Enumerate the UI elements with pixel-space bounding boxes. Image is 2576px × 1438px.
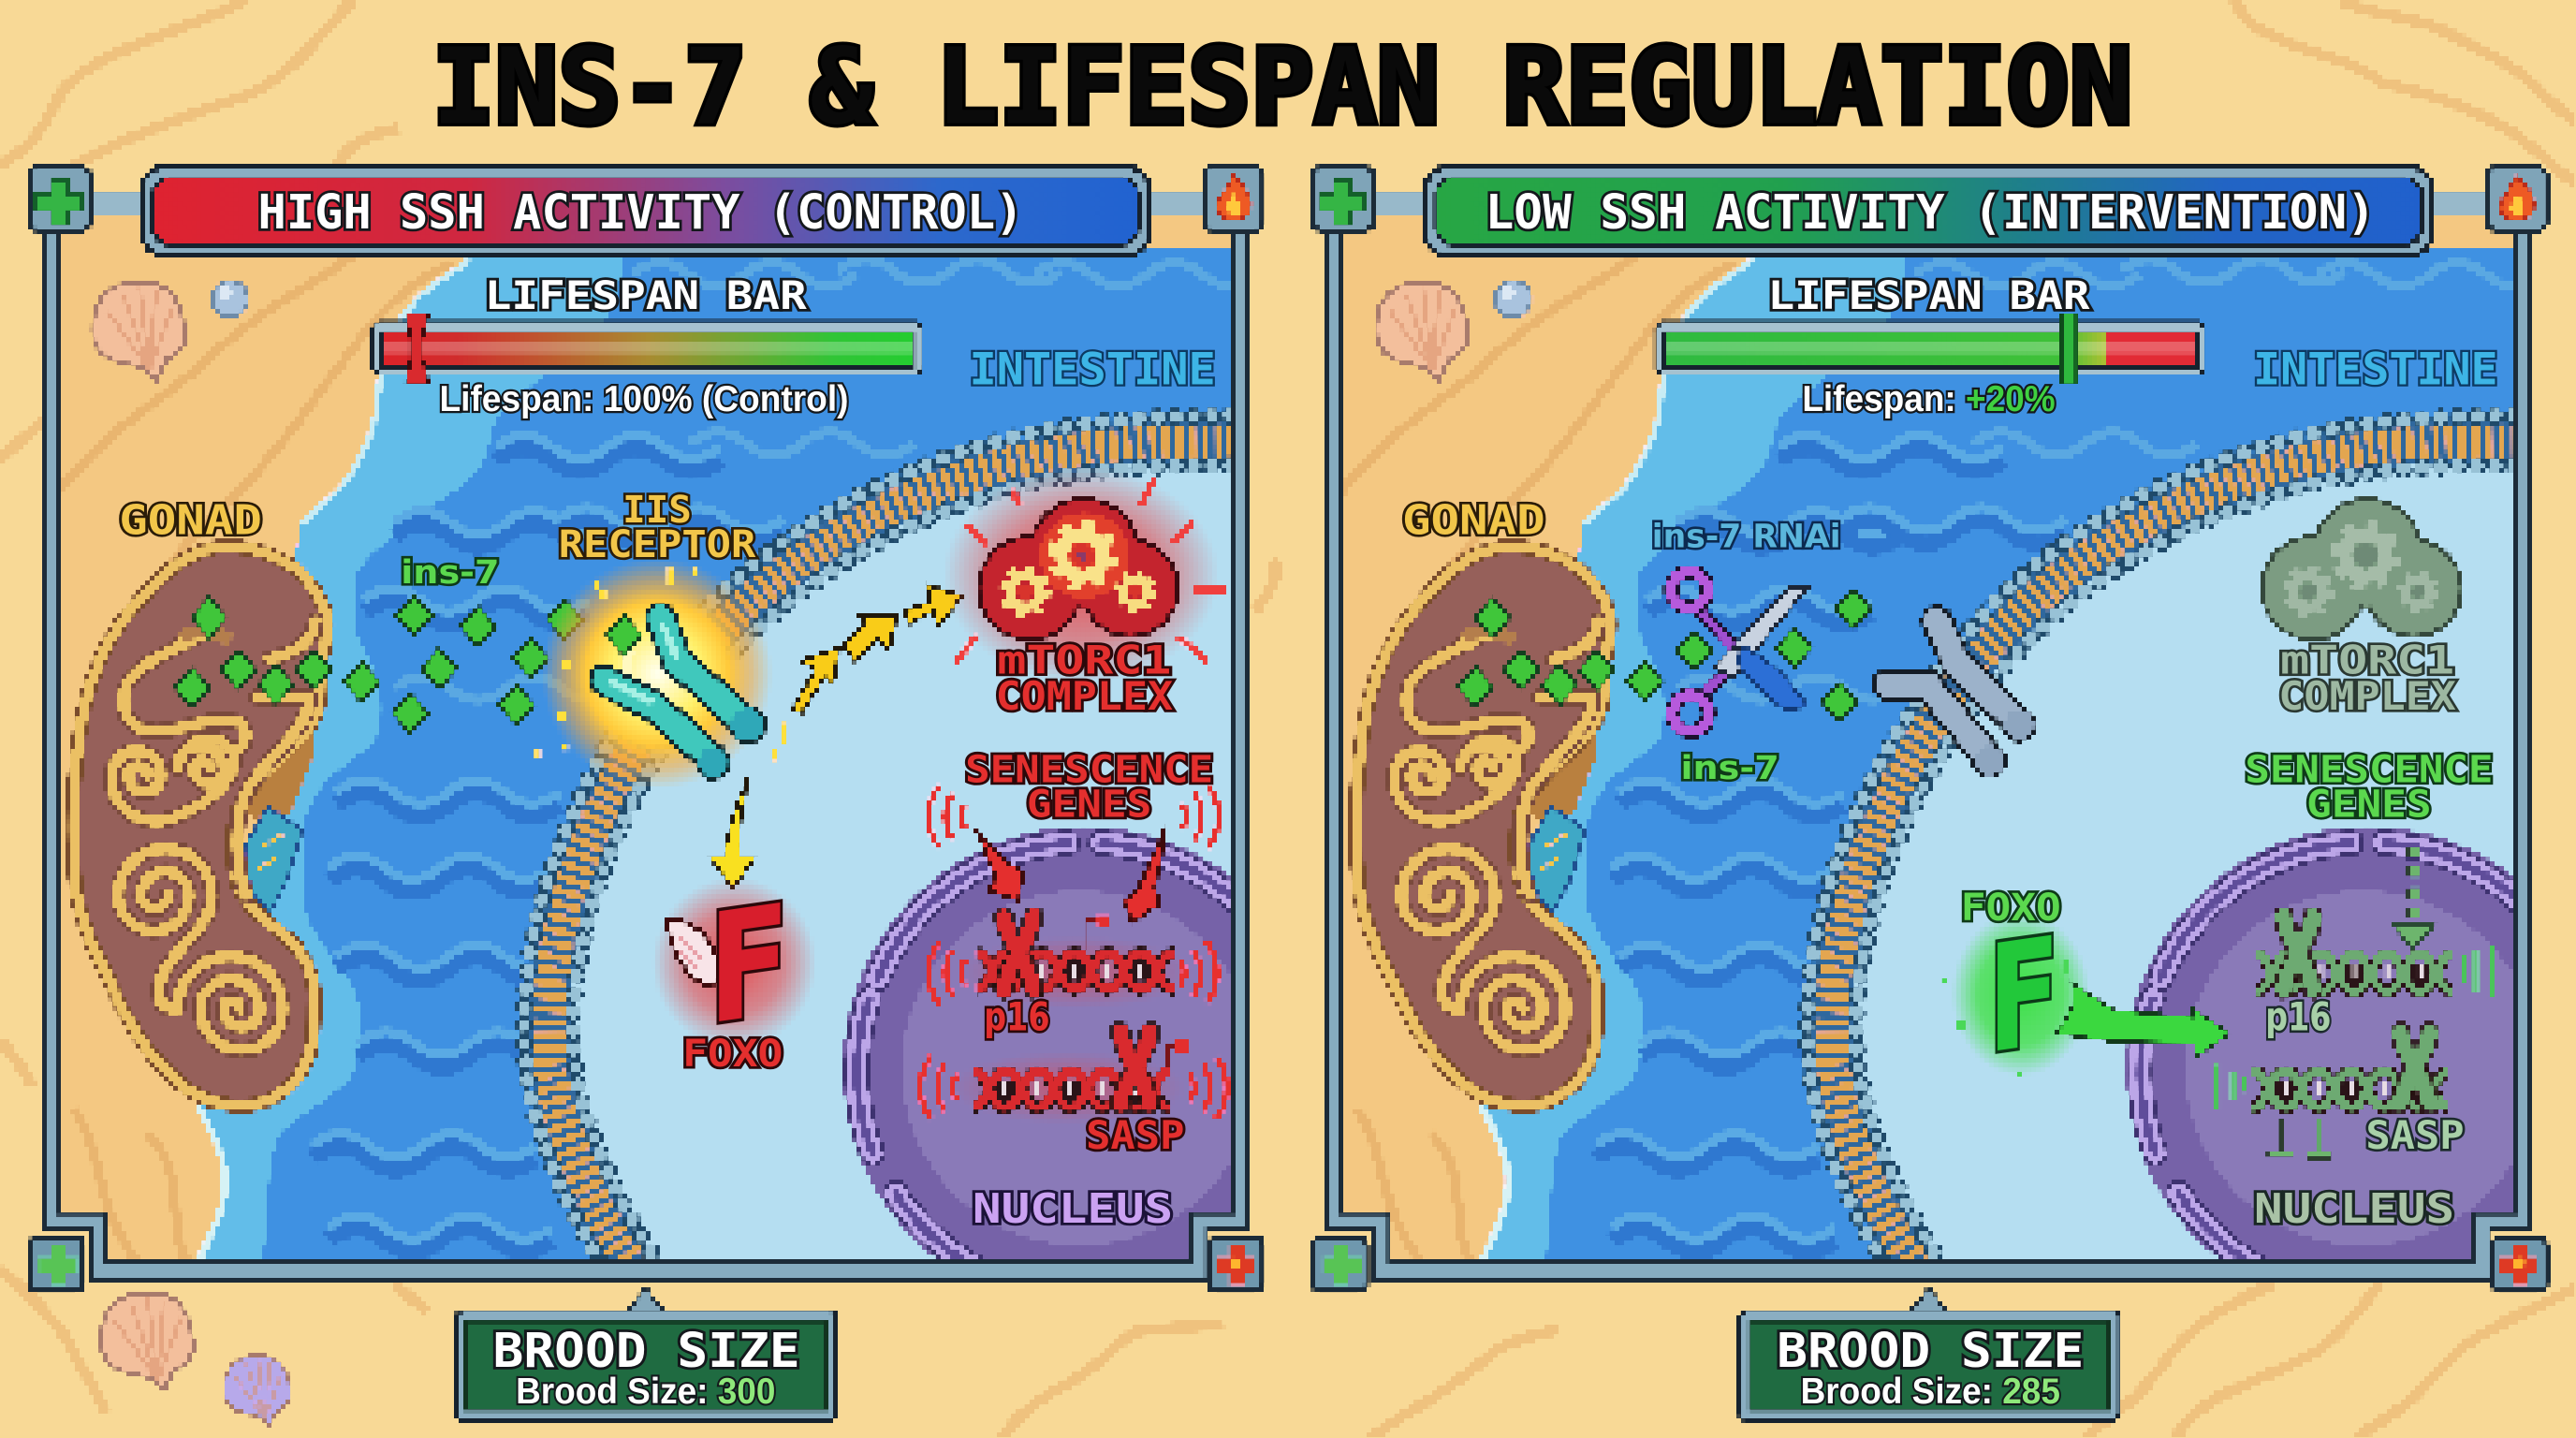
lifespan bar xyxy=(372,314,923,383)
icon: active mTORC1 complex xyxy=(943,466,1225,683)
lifespan value: Lifespan: 100% (Control) xyxy=(439,379,849,419)
inhibition T bars xyxy=(2267,1117,2333,1155)
senescence genes label: SENESCENCE xyxy=(965,747,1213,791)
lifespan bar label: LIFESPAN BAR xyxy=(1767,272,2090,318)
title: INS-7 & LIFESPAN REGULATION xyxy=(432,27,2132,149)
icon: activated IIS receptor with glow xyxy=(535,559,787,788)
mTORC1 label xyxy=(996,638,1173,719)
panel: low SSH activity (intervention) scene xyxy=(1312,165,2576,1421)
icon: bottom lavender shell xyxy=(225,1356,290,1426)
FOXO label: FOXO xyxy=(1961,886,2061,930)
icon: bottom peach shell xyxy=(101,1293,193,1390)
frame xyxy=(30,168,1264,1292)
nucleus with silenced genes xyxy=(2125,828,2513,1259)
icon: pebble xyxy=(1495,281,1531,317)
frame xyxy=(1312,168,2546,1292)
FOXO letter icon: F xyxy=(708,872,790,1059)
FOXO label: FOXO xyxy=(682,1032,783,1076)
senescence genes label: GENES xyxy=(1027,782,1151,826)
sound arcs xyxy=(920,785,1227,1119)
brood size value: Brood Size: 300 xyxy=(516,1372,775,1412)
intestine scene with sand, water and membrane xyxy=(1332,205,2541,1282)
SASP label: SASP xyxy=(1086,1112,1184,1158)
header text: HIGH SSH ACTIVITY (CONTROL) xyxy=(258,185,1023,241)
brood size box xyxy=(455,1288,838,1421)
panel: high SSH activity (control) scene xyxy=(30,165,1325,1421)
mTORC1 label: COMPLEX xyxy=(2278,673,2456,719)
nucleus label: NUCLEUS xyxy=(973,1185,1173,1233)
senescence genes label: SENESCENCE xyxy=(2245,747,2493,791)
IIS receptor label xyxy=(559,488,756,566)
ins-7 peptide diamonds xyxy=(1457,590,1871,721)
active red arrows xyxy=(976,827,1164,923)
labels: control panel xyxy=(119,185,1216,1412)
lifespan bar xyxy=(1654,314,2206,383)
header pill xyxy=(139,165,1151,258)
p16 label: p16 xyxy=(2265,993,2331,1039)
brood size value: Brood Size: 285 xyxy=(1801,1372,2060,1412)
header pill xyxy=(1423,165,2435,258)
icon: inactive IIS receptor xyxy=(1888,621,2034,775)
ins-7 label: ins-7 xyxy=(1680,749,1779,787)
mTORC1 label xyxy=(2278,638,2456,719)
senescence genes label xyxy=(2245,747,2493,826)
IIS receptor label: RECEPTOR xyxy=(559,522,756,566)
icon: scallop shell xyxy=(1376,283,1468,379)
icon: RNAi scissors xyxy=(1671,572,1808,731)
ins-7 RNAi label: ins-7 RNAi xyxy=(1652,517,1841,555)
icon: pebble xyxy=(212,281,248,317)
gonad label: GONAD xyxy=(119,496,262,544)
FOXO glow xyxy=(1940,912,2089,1077)
mTORC1 label: mTORC1 xyxy=(997,638,1171,683)
lifespan value: Lifespan: +20% xyxy=(1802,379,2056,419)
active p16 gene xyxy=(958,916,1194,1009)
intestine scene with sand, water and membrane xyxy=(50,205,1258,1282)
dashed green inhibition arrow xyxy=(2392,848,2435,949)
senescence genes label: GENES xyxy=(2306,782,2432,826)
icon: inactive mTORC1 complex xyxy=(2264,501,2459,638)
silenced SASP gene xyxy=(2217,1032,2450,1109)
icon: gonad xyxy=(73,547,327,1106)
SASP label: SASP xyxy=(2365,1112,2465,1158)
mTORC1 label: mTORC1 xyxy=(2280,638,2454,683)
gonad label: GONAD xyxy=(1402,496,1545,544)
nucleus with active genes xyxy=(842,783,1231,1259)
icon: scallop shell xyxy=(93,283,185,379)
ins-7 label: ins-7 xyxy=(401,553,500,592)
icon: gonad xyxy=(1356,547,1610,1106)
intestine label: INTESTINE xyxy=(970,345,1216,396)
senescence genes label xyxy=(965,747,1213,826)
FOXO activation arrow xyxy=(2056,983,2230,1058)
labels: intervention panel xyxy=(1402,185,2498,1412)
lifespan bar label: LIFESPAN BAR xyxy=(485,272,807,318)
icon: FOXO glow and wing xyxy=(652,877,816,1049)
intestine label: INTESTINE xyxy=(2253,345,2498,396)
brood size heading: BROOD SIZE xyxy=(493,1324,800,1379)
mTORC1 label: COMPLEX xyxy=(996,673,1173,719)
nucleus label: NUCLEUS xyxy=(2254,1185,2454,1233)
p16 label: p16 xyxy=(984,993,1050,1039)
FOXO letter icon: F xyxy=(1988,905,2060,1087)
active SASP gene xyxy=(949,1032,1190,1123)
signal arrow to FOXO xyxy=(710,775,755,889)
ins-7 peptide diamonds xyxy=(174,596,583,733)
IIS receptor label: IIS xyxy=(622,488,692,532)
signal arrows to mTORC1 xyxy=(792,585,962,713)
header text: LOW SSH ACTIVITY (INTERVENTION) xyxy=(1486,185,2376,241)
silenced p16 gene xyxy=(2256,917,2491,996)
brood size box xyxy=(1738,1288,2121,1421)
brood size heading: BROOD SIZE xyxy=(1777,1324,2084,1379)
